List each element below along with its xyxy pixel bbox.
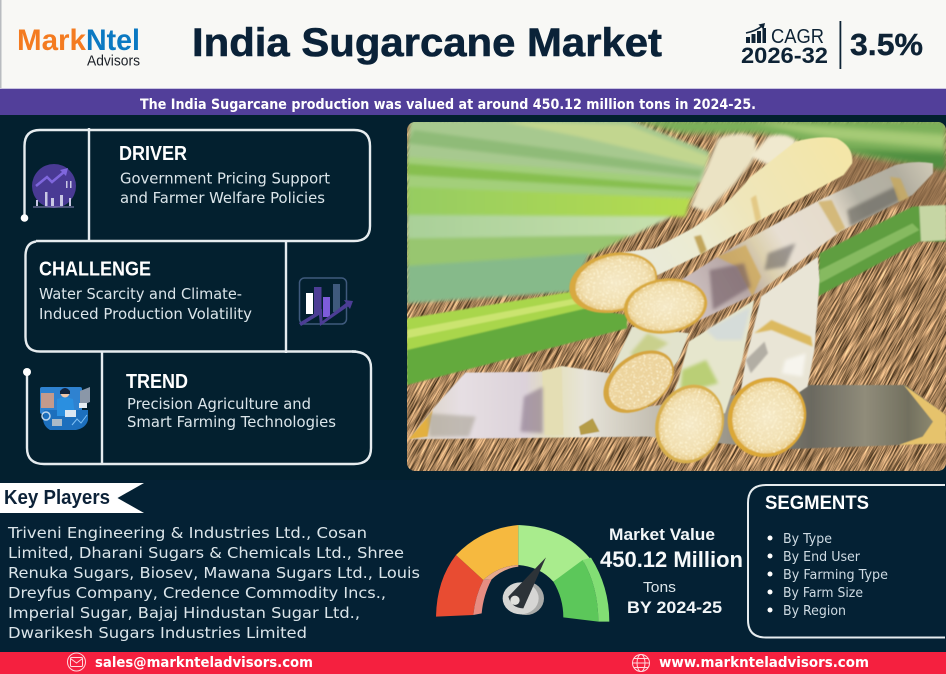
photo: sugarcane stalks on woven mat	[407, 120, 946, 475]
gauge chart	[436, 525, 609, 622]
trend text: Smart Farming Technologies	[127, 413, 336, 431]
CAGR label: 2026-32	[741, 43, 828, 68]
icon: driver growth globe	[32, 164, 76, 208]
market value callout: Market Value	[609, 525, 715, 544]
logo: MarkNtel Advisors: Mark	[17, 24, 86, 57]
segments list: By Region	[783, 603, 846, 619]
challenge text	[39, 258, 252, 323]
footer contact bar	[0, 652, 946, 674]
key players list: Imperial Sugar, Bajaj Hindustan Sugar Ltd.,	[8, 604, 360, 622]
trend text	[126, 371, 336, 431]
panel: challenge	[26, 241, 356, 353]
trend text: Precision Agriculture and	[127, 395, 311, 413]
right leaf behind stalks	[818, 205, 946, 297]
subtitle band: The India Sugarcane production was valued at around 450.12 million tons in 2024-25.	[140, 97, 756, 113]
icon: email	[68, 653, 86, 671]
challenge text: Induced Production Volatility	[39, 305, 252, 323]
segments list: By Farming Type	[783, 567, 888, 583]
CAGR label	[741, 26, 828, 68]
panel: trend	[23, 351, 371, 464]
driver text	[119, 143, 330, 207]
key players list: Limited, Dharani Sugars & Chemicals Ltd., Shree	[8, 544, 404, 562]
stalk: lower left cut cane	[602, 326, 690, 414]
segments list: By Type	[783, 531, 832, 547]
stalk: main diagonal cane	[620, 162, 933, 339]
icon: CAGR growth bars	[746, 23, 766, 43]
market value callout: 450.12 Million	[600, 547, 743, 572]
segments list: By End User	[783, 549, 860, 565]
market value callout: Tons	[643, 579, 676, 596]
market value callout	[600, 525, 743, 617]
stalk: front cane	[727, 256, 820, 458]
panel: segments	[748, 485, 945, 638]
key players list: Triveni Engineering & Industries Ltd., Cosan	[7, 524, 367, 542]
top right leaves	[627, 120, 946, 170]
left fan leaves	[407, 120, 710, 303]
stalk: upper cut cane	[563, 137, 852, 322]
driver text: and Farmer Welfare Policies	[120, 189, 325, 207]
icon: challenge bar chart	[299, 278, 353, 326]
trend text: TREND	[126, 371, 188, 393]
stalk: middle cane	[654, 300, 755, 464]
key players list	[7, 524, 420, 642]
stalk: bottom horizontal cane	[409, 366, 946, 449]
icon: globe	[632, 654, 650, 672]
CAGR label: CAGR	[771, 26, 824, 48]
logo: MarkNtel Advisors: Ntel	[86, 24, 140, 57]
CAGR value: 3.5%	[850, 27, 923, 62]
segments list	[768, 531, 888, 619]
key players list: Dreyfus Company, Credence Commodity Incs.,	[8, 584, 386, 602]
challenge text: Water Scarcity and Climate-	[39, 285, 242, 303]
key players list: Dwarikesh Sugars Industries Limited	[8, 624, 307, 642]
logo: MarkNtel Advisors: Advisors	[87, 52, 140, 70]
panel: driver	[21, 128, 370, 241]
challenge text: CHALLENGE	[39, 258, 151, 280]
title: India Sugarcane Market	[192, 21, 662, 65]
icon: trend farmer with screens	[40, 387, 90, 430]
header bar	[0, 0, 946, 89]
driver text: Government Pricing Support	[120, 170, 330, 188]
back canes	[691, 134, 795, 212]
key players list: Renuka Sugars, Biosev, Mawana Sugars Ltd., Louis	[8, 564, 420, 582]
driver text: DRIVER	[119, 143, 187, 165]
website address: www.marknteladvisors.com	[659, 655, 869, 671]
market value callout: BY 2024-25	[627, 598, 722, 617]
key players ribbon	[0, 483, 144, 513]
segments list: By Farm Size	[783, 585, 863, 601]
key players ribbon: Key Players	[4, 487, 110, 509]
logo: MarkNtel Advisors	[17, 24, 140, 70]
subtitle band	[0, 89, 946, 115]
segments heading: SEGMENTS	[765, 492, 869, 514]
email address: sales@marknteladvisors.com	[95, 655, 313, 671]
